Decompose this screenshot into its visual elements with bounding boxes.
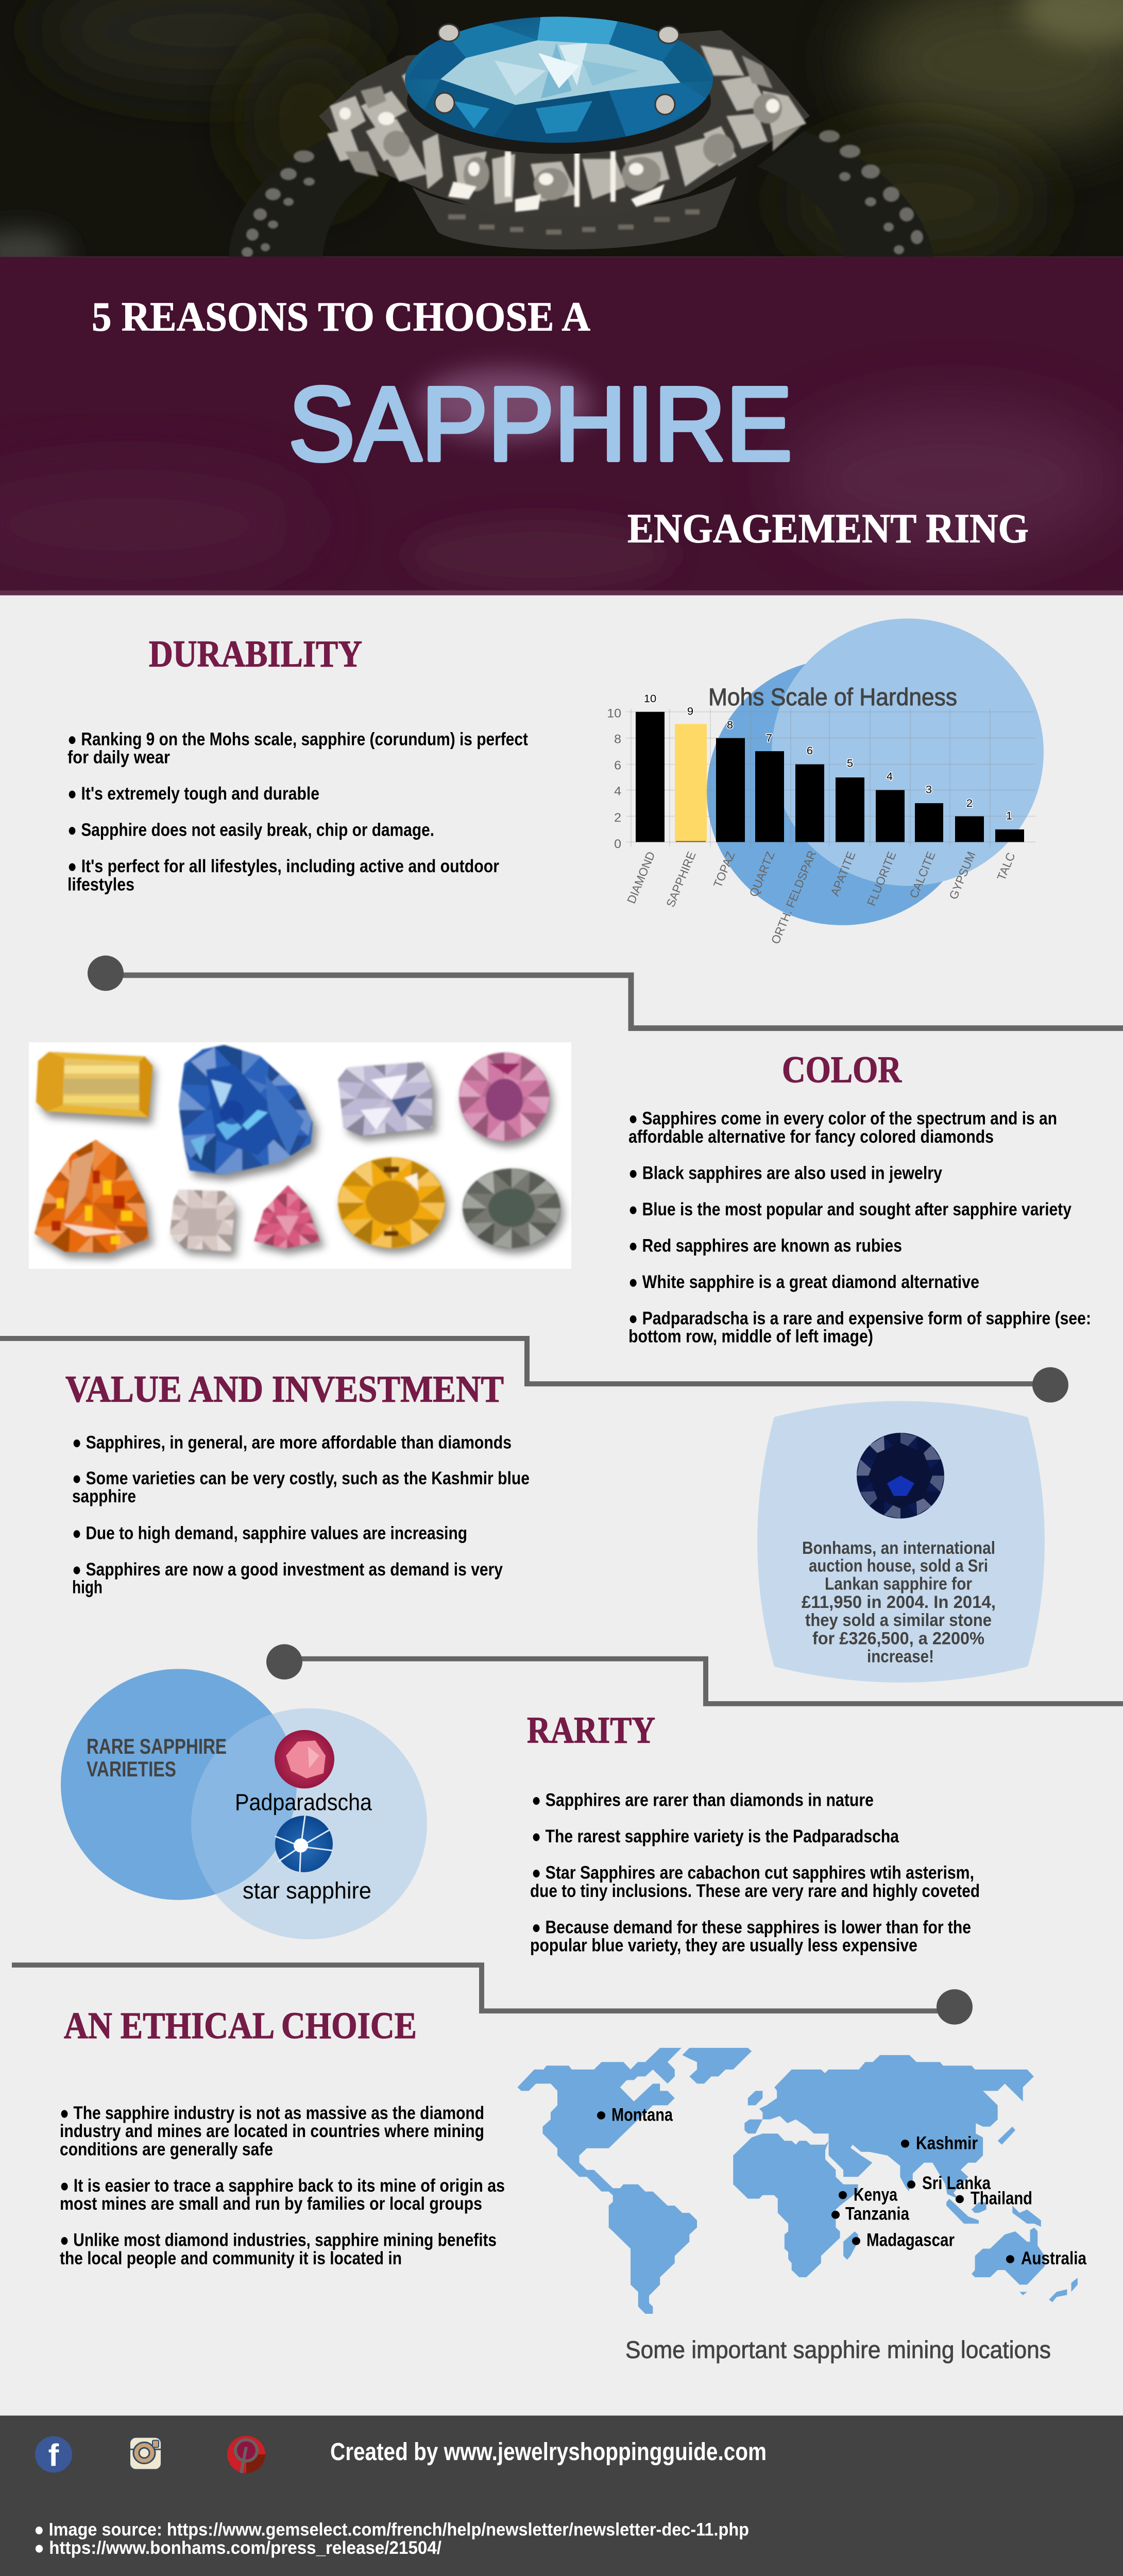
title banner [0,257,1123,596]
value labels [644,692,1012,822]
value labels: 10 [644,692,656,705]
y axis labels: 6 [614,759,621,772]
text block: color: ● White sapphire is a great diamond alternative [628,1272,979,1292]
card text: they sold a similar stone [805,1611,992,1630]
halo of diamonds [319,30,810,216]
gem shadows [38,1052,564,1259]
footer [0,2416,1123,2576]
text block: ethical choice: the local people and community it is located in [60,2248,402,2268]
text block: durability: for daily wear [67,747,170,768]
text block: value and investment: ● Some varieties can be very costly, such as the Kashmir blue [72,1468,530,1488]
category labels: TALC [994,851,1018,882]
category labels [624,849,1018,946]
heading: an ethical choice: AN ETHICAL CHOICE [64,2005,417,2047]
heading: color: COLOR [782,1049,902,1091]
venn label: RARE SAPPHIRE [87,1734,227,1759]
icon: padparadscha gem [275,1730,334,1788]
text block: durability [67,729,528,894]
map caption: Some important sapphire mining locations [625,2336,1051,2364]
value labels: 9 [687,705,693,718]
gem: blue [170,1042,317,1178]
connector 4 [12,1965,973,2025]
value labels: 6 [807,744,813,757]
venn label: VARIETIES [87,1757,176,1782]
card text: auction house, sold a Sri [809,1556,988,1575]
y axis labels: 8 [614,733,621,746]
padparadscha label: Padparadscha [235,1789,372,1815]
text block: value and investment [72,1432,530,1597]
star sapphire label: star sapphire [243,1877,371,1904]
category labels: CALCITE [907,850,938,900]
text block: ethical choice: most mines are small and run by families or local groups [60,2193,482,2214]
category labels: QUARTZ [746,850,777,899]
card text: for £326,500, a 2200% [812,1629,984,1648]
category labels: APATITE [828,850,858,898]
callout card: bonhams auction [759,1403,1043,1681]
text block: value and investment: ● Sapphires, in general, are more affordable than diamonds [72,1432,512,1452]
y axis labels: 2 [614,811,621,825]
category labels: ORTH. FELDSPAR [768,849,819,946]
marker: kashmir [901,2133,978,2153]
heading: rarity: RARITY [527,1709,655,1751]
ring band [229,138,380,257]
text block: value and investment: ● Due to high demand, sapphire values are increasing [72,1523,467,1544]
world map [517,2048,1078,2314]
value labels: 8 [727,718,733,731]
text block: rarity: due to tiny inclusions. These are very rare and highly coveted [530,1880,980,1901]
icon: star sapphire gem [275,1816,333,1872]
value labels: 3 [926,783,932,795]
marker: kashmir: Kashmir [916,2133,978,2153]
value labels: 5 [847,757,853,769]
text block: rarity: ● Because demand for these sapphires is lower than for the [532,1917,971,1937]
marker: kenya: Kenya [854,2184,898,2205]
marker: montana: Montana [611,2105,673,2125]
category labels: FLUORITE [864,850,899,908]
y axis labels: 4 [614,785,621,798]
venn label [87,1734,227,1782]
heading: durability: DURABILITY [149,633,362,675]
text block: rarity: ● Sapphires are rarer than diamonds in nature [532,1790,874,1810]
marker: sri lanka: Sri Lanka [922,2173,991,2193]
card text: Lankan sapphire for [825,1574,972,1594]
gem: lilac [326,1054,445,1144]
text block: ethical choice: industry and mines are located in countries where mining [60,2121,484,2141]
marker: thailand: Thailand [971,2188,1032,2208]
text block: color: ● Black sapphires are also used in jewelry [628,1163,942,1183]
category labels: TOPAZ [710,850,738,889]
text block: rarity: ● The rarest sapphire variety is the Padparadscha [532,1826,899,1846]
text block: ethical choice: conditions are generally safe [60,2139,273,2159]
icon: facebook [35,2436,72,2473]
text block: value and investment: high [72,1577,103,1597]
card text [802,1538,996,1667]
marker: australia: Australia [1021,2248,1087,2268]
y axis labels: 10 [607,707,621,720]
chart title: Mohs Scale of Hardness [708,684,957,711]
value labels: 7 [766,732,772,744]
category labels: DIAMOND [624,850,658,905]
y axis labels [607,707,621,851]
text block: color: affordable alternative for fancy colored diamonds [628,1126,994,1147]
text block: ethical choice: ● The sapphire industry is not as massive as the diamond [60,2103,484,2123]
text block: color [628,1108,1091,1347]
text block: ethical choice [60,2103,505,2268]
gem: padparadscha pale [161,1179,244,1260]
value labels: 1 [1006,809,1012,822]
category labels: GYPSUM [946,850,978,901]
text block: durability: lifestyles [67,874,134,894]
text block: color: ● Red sapphires are known as rubies [628,1235,902,1256]
credit line: Created by www.jewelryshoppingguide.com [330,2438,767,2466]
marker: montana [597,2105,673,2125]
lower setting [412,177,737,249]
icon: instagram [130,2437,161,2469]
category labels: SAPPHIRE [663,850,699,909]
marker: australia [1006,2248,1087,2268]
text block: durability: ● Sapphire does not easily break, chip or damage. [67,820,434,840]
marker: madagascar: Madagascar [866,2230,955,2250]
title line 1: 5 REASONS TO CHOOSE A [92,294,590,340]
header photo: sapphire ring [0,0,1123,275]
heading: value and investment: VALUE AND INVESTMENT [65,1368,504,1410]
image sources: ● Image source: https://www.gemselect.com/french/help/newsletter/newsletter-dec-11.php [34,2519,749,2540]
gem: orange [28,1138,157,1266]
venn diagram: rare sapphire varieties [61,1669,427,1939]
text block: rarity [530,1790,980,1956]
map markers and labels [597,2105,1087,2268]
text block: ethical choice: ● Unlike most diamond industries, sapphire mining benefits [60,2230,497,2250]
image sources [34,2519,749,2558]
connector 1 [88,956,1123,1028]
y axis labels: 0 [614,837,621,851]
text block: durability: ● Ranking 9 on the Mohs scale, sapphire (corundum) is perfect [67,729,528,749]
icon: pinterest [227,2436,265,2473]
marker: thailand [956,2188,1032,2208]
text block: color: bottom row, middle of left image) [628,1326,873,1347]
text block: rarity: ● Star Sapphires are cabachon cut sapphires wtih asterism, [532,1862,974,1883]
connector 3 [266,1644,1123,1704]
gem: yellow [36,1052,152,1117]
value labels: 4 [887,770,893,783]
gem: pink trillion [251,1183,323,1253]
card text: Bonhams, an international [802,1538,995,1558]
prongs [435,24,679,114]
gem: amber [338,1157,445,1248]
bars [636,712,1024,842]
connector 2 [0,1338,1068,1402]
card text: increase! [867,1647,934,1667]
chart: mohs scale of hardness [607,619,1044,946]
title line 2: ENGAGEMENT RING [627,505,1029,551]
marker: kenya [839,2184,898,2205]
image sources: ● https://www.bonhams.com/press_release/21504/ [34,2537,441,2558]
text block: rarity: popular blue variety, they are usually less expensive [530,1935,917,1956]
text block: value and investment: sapphire [72,1486,136,1506]
dark bezel shadow under gem [407,93,711,154]
icon: dark blue sapphire [857,1433,944,1519]
image: assorted coloured sapphires [28,1042,571,1269]
title word SAPPHIRE: SAPPHIRE [288,365,792,483]
card text: £11,950 in 2004. In 2014, [802,1592,996,1612]
text block: durability: ● It's extremely tough and durable [67,783,319,804]
text block: ethical choice: ● It is easier to trace a sapphire back to its mine of origin as [60,2175,505,2196]
value labels: 2 [966,796,973,809]
gem: pink round [459,1053,550,1141]
text block: value and investment: ● Sapphires are now a good investment as demand is very [72,1560,503,1580]
gem: grey [463,1168,560,1248]
icon: facebook: f [48,2438,59,2473]
marker: tanzania: Tanzania [845,2204,910,2224]
text block: durability: ● It's perfect for all lifestyles, including active and outdoor [67,856,499,876]
